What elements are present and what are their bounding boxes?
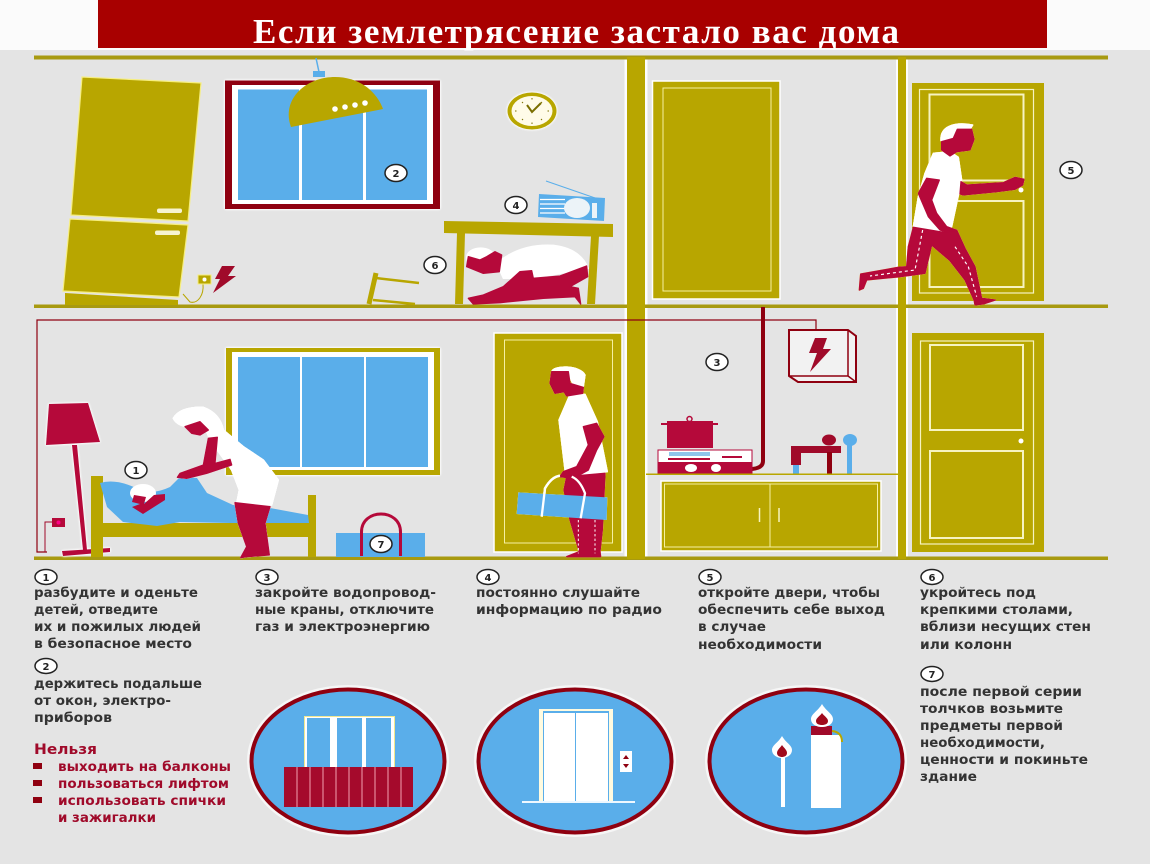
instruction 7: необходимости,: [920, 736, 1045, 751]
instruction 3: закройте водопровод-: [255, 586, 436, 601]
item marker 1: 1: [43, 573, 50, 584]
instruction 1 text: детей, отведите: [34, 603, 158, 618]
marker 5: [1060, 162, 1082, 178]
instruction 1 text: их и пожилых людей: [34, 620, 201, 635]
table: [444, 221, 613, 304]
marker 4: [505, 196, 527, 214]
instruction 7: [920, 666, 1088, 785]
instruction 5: 5: [707, 573, 714, 584]
gas pipe: [752, 307, 763, 469]
blanket: [100, 477, 309, 526]
kitchen cabinet: [646, 474, 898, 551]
electric wire: [37, 320, 816, 552]
instruction 7: толчков возьмите: [920, 702, 1063, 717]
instruction 5: [698, 570, 885, 653]
door upper middle: [652, 81, 780, 299]
door lower middle: [494, 333, 622, 552]
marker 1: 1: [133, 466, 140, 477]
woman bending over bed: [173, 407, 278, 558]
oval icon: match and lighter: [705, 685, 907, 837]
electric panel: [789, 330, 856, 382]
instruction 2 text: держитесь подальше: [34, 677, 202, 692]
building structure: floors and walls: [34, 56, 1108, 560]
instruction 3: 3: [264, 573, 271, 584]
running person: [859, 124, 1024, 305]
instruction 3: [255, 570, 436, 635]
fridge: [63, 77, 201, 305]
water taps: [791, 434, 857, 474]
window lower: [226, 348, 440, 475]
wall socket: [45, 518, 65, 552]
instruction 6: [920, 570, 1091, 653]
oval icon: balcony: [247, 685, 449, 837]
instruction 6: или колонн: [920, 638, 1012, 653]
forbidden list: Нельзя: [34, 742, 97, 758]
instruction 7: после первой серии: [920, 685, 1082, 700]
bag with marker 7: [336, 514, 425, 557]
ceiling lamp: [289, 58, 383, 127]
instruction 6: крепкими столами,: [920, 603, 1073, 618]
marker 2: 2: [393, 169, 400, 180]
door lower right: [912, 333, 1044, 552]
marker 4: 4: [513, 201, 520, 212]
item marker 2: [35, 658, 57, 674]
floor lamp: [46, 403, 110, 556]
instruction 4: [476, 570, 662, 618]
radio: [538, 181, 605, 221]
instruction 6: 6: [929, 573, 936, 584]
instruction 4: информацию по радио: [476, 603, 662, 618]
pot on stove: [658, 416, 752, 474]
instruction 5: откройте двери, чтобы: [698, 586, 880, 601]
instruction 5: в случае: [698, 620, 766, 635]
forbidden list: и зажигалки: [58, 811, 156, 826]
instruction 7: 7: [929, 670, 936, 681]
instruction 2 text: от окон, электро-: [34, 694, 171, 709]
instruction 5: необходимости: [698, 638, 822, 653]
instruction 3: ные краны, отключите: [255, 603, 434, 618]
instruction 4: 4: [485, 573, 492, 584]
standing person with bag: [517, 367, 607, 557]
marker 6: [424, 256, 446, 274]
fallen chair: [369, 273, 419, 304]
instruction 5: обеспечить себе выход: [698, 603, 885, 618]
marker 6: 6: [432, 261, 439, 272]
marker 1: [125, 462, 147, 478]
forbidden list: пользоваться лифтом: [58, 777, 229, 792]
clock: [508, 92, 556, 130]
instruction 1 text: в безопасное место: [34, 637, 192, 652]
oval icon: elevator: [474, 685, 676, 837]
instruction 1 text: [34, 586, 201, 652]
bed: [91, 476, 316, 557]
bag with marker 7: 7: [378, 540, 385, 551]
title banner: Если землетрясение застало вас дома: [253, 12, 899, 51]
forbidden list: выходить на балконы: [58, 760, 231, 775]
forbidden list: использовать спички: [58, 794, 226, 809]
title banner: [98, 0, 1047, 51]
instruction 7: предметы первой: [920, 719, 1063, 734]
marker 2: [385, 164, 407, 182]
window top with red frame: [225, 80, 440, 209]
person crouching under table: [466, 245, 588, 304]
marker 5: 5: [1068, 166, 1075, 177]
marker 3: 3: [714, 358, 721, 369]
item marker 1: [35, 570, 57, 584]
instruction 6: укройтесь под: [920, 586, 1036, 601]
instruction 4: постоянно слушайте: [476, 586, 640, 601]
instruction 1 text: разбудите и оденьте: [34, 586, 198, 601]
instruction 2 text: приборов: [34, 711, 112, 726]
instruction 2 text: [34, 677, 202, 726]
instruction 7: здание: [920, 770, 977, 785]
socket and spark: [183, 266, 236, 302]
item marker 2: 2: [43, 662, 50, 673]
marker 3: [706, 354, 728, 370]
forbidden list: [33, 742, 231, 826]
instruction 7: ценности и покиньте: [920, 753, 1088, 768]
door upper right: [912, 83, 1044, 301]
child in bed: [130, 484, 165, 514]
instruction 3: газ и электроэнергию: [255, 620, 430, 635]
instruction column 1: [33, 570, 231, 826]
instruction 6: вблизи несущих стен: [920, 620, 1091, 635]
